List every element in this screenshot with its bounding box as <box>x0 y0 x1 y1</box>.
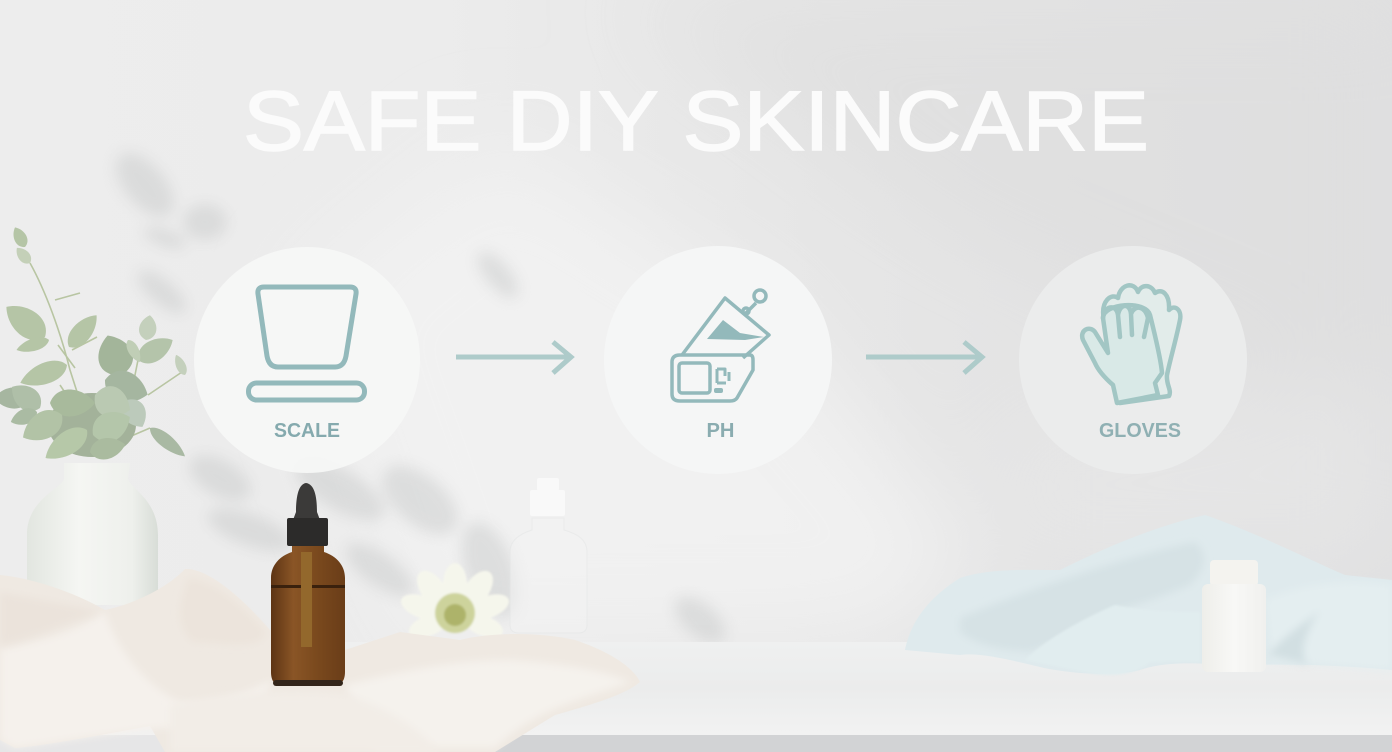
table surface <box>0 642 1392 735</box>
circle: scale <box>194 247 420 473</box>
white vase <box>27 463 158 605</box>
arrow: scale to pH <box>456 342 571 373</box>
label: SCALE: SCALE <box>274 420 340 442</box>
amber dropper bottle <box>271 483 345 686</box>
beige linen cloth <box>0 569 640 752</box>
daisy flower <box>398 563 512 642</box>
pump bottle <box>510 478 587 633</box>
arrow: pH to gloves <box>866 342 982 373</box>
icon: scale <box>248 287 364 400</box>
label: GLOVES: GLOVES <box>1099 420 1181 442</box>
table front edge <box>165 735 1392 752</box>
diagonal light beam <box>300 0 1392 640</box>
white jar <box>1202 560 1266 672</box>
circle: pH <box>604 246 832 474</box>
table front edge left <box>0 735 165 752</box>
label: PH: PH <box>706 420 734 442</box>
icon: gloves <box>1082 285 1180 403</box>
wall leaf shadows <box>105 143 733 652</box>
title: SAFE DIY SKINCARE <box>243 74 1149 168</box>
icon: pH meter <box>672 290 769 401</box>
circle: gloves <box>1019 246 1247 474</box>
pale blue cloth <box>905 515 1392 675</box>
plant with stems and leaves <box>0 225 189 468</box>
